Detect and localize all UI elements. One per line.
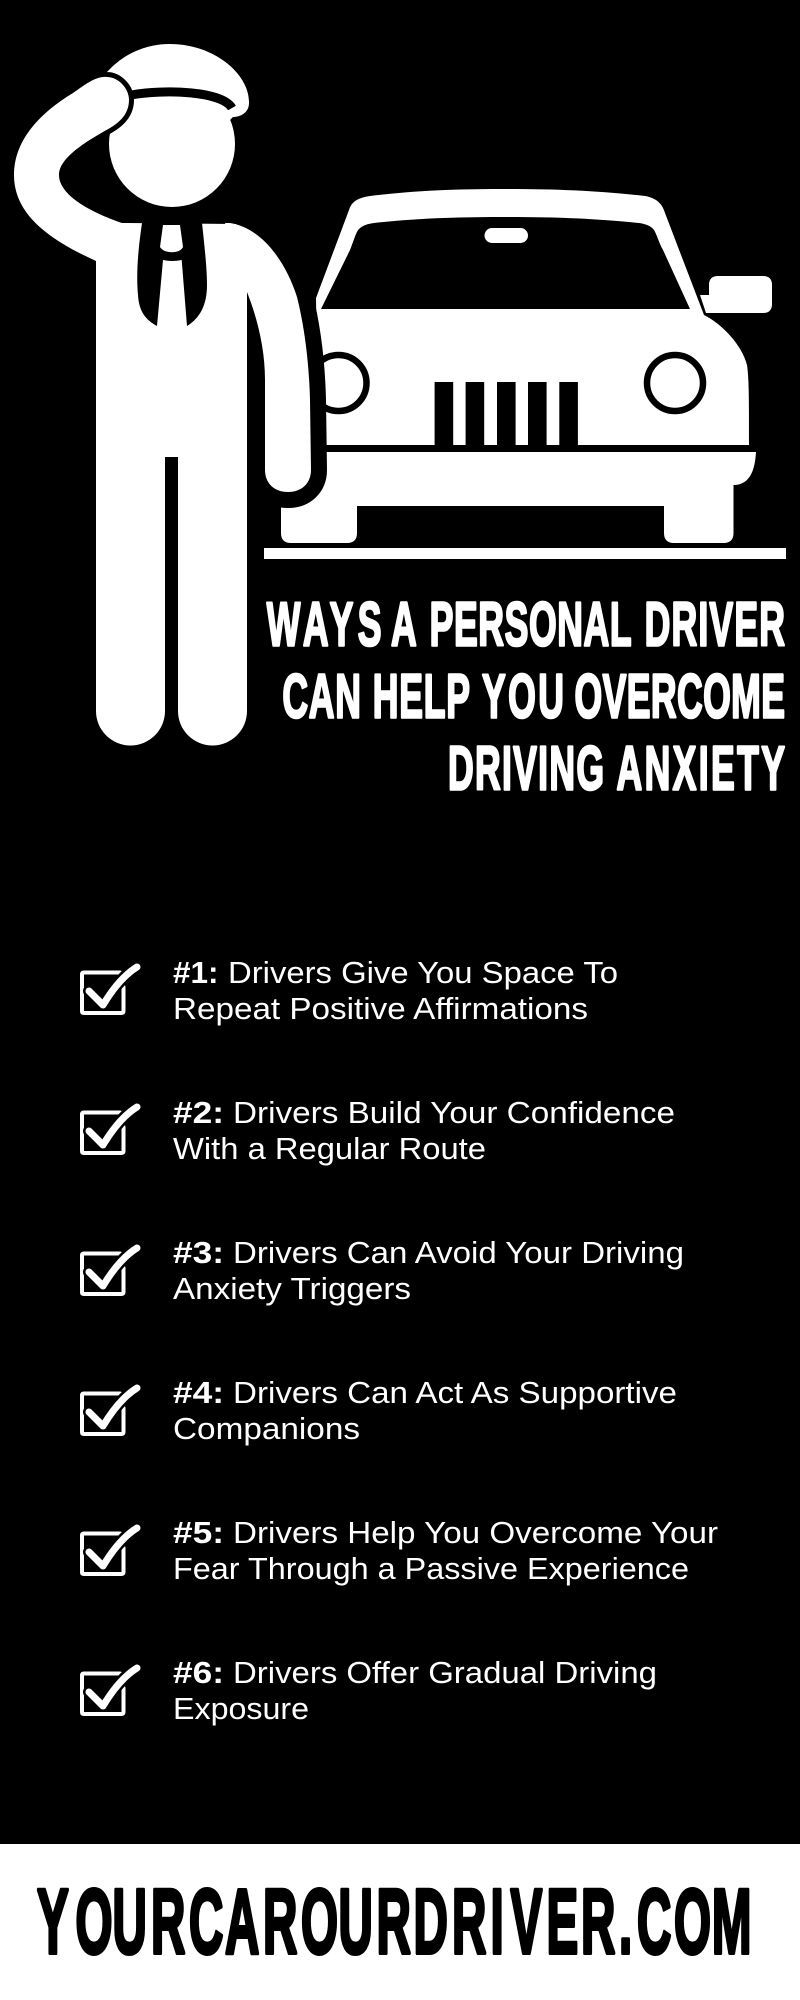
title: YOU	[482, 661, 564, 731]
car body and roof	[316, 189, 749, 445]
footer band	[0, 1844, 800, 2000]
title: OVERCOME	[575, 661, 785, 731]
title: HELP	[373, 661, 470, 731]
list item 6: Exposure	[173, 1691, 309, 1726]
title: CAN	[282, 661, 361, 731]
list item 5: Fear Through a Passive Experience	[173, 1551, 689, 1586]
list item 1: Repeat Positive Affirmations	[173, 991, 588, 1026]
list item 2: Drivers Build Your Confidence	[233, 1095, 675, 1130]
icon: checkbox	[82, 1668, 137, 1714]
title: DRIVING	[448, 733, 604, 803]
driver lowered arm	[225, 223, 311, 492]
tie knot	[160, 225, 183, 252]
list item 4: Drivers Can Act As Supportive	[233, 1375, 677, 1410]
list item 5: #5:	[173, 1515, 224, 1550]
list item 6: #6:	[173, 1655, 224, 1690]
icon: checkbox	[82, 1528, 137, 1574]
driver collar	[137, 223, 207, 326]
list item 2: With a Regular Route	[173, 1131, 486, 1166]
icon: car front view	[281, 189, 772, 543]
ground line	[264, 548, 786, 559]
tie blade	[157, 260, 187, 326]
title: ANXIETY	[617, 733, 785, 803]
driver torso and legs	[96, 223, 260, 746]
bumper and wheels	[281, 452, 756, 543]
list item 2	[82, 1095, 675, 1166]
title: DRIVER	[645, 589, 785, 659]
icon: checkbox	[82, 967, 137, 1013]
list item 1: Drivers Give You Space To	[228, 955, 618, 990]
list item 3: #3:	[173, 1235, 224, 1270]
list item 3	[82, 1235, 684, 1306]
driver raised arm	[14, 77, 129, 280]
list item 4: #4:	[173, 1375, 224, 1410]
left headlight	[310, 355, 366, 411]
list item 1	[82, 955, 618, 1026]
grille	[435, 382, 578, 445]
title: WAYS	[267, 589, 382, 659]
side mirror	[700, 276, 772, 313]
cap band	[131, 92, 232, 108]
icon: checkbox	[82, 1107, 137, 1153]
list item 6: Drivers Offer Gradual Driving	[233, 1655, 657, 1690]
list item 6	[82, 1655, 657, 1726]
list item 3: Anxiety Triggers	[173, 1271, 411, 1306]
right headlight	[647, 355, 703, 411]
footer website: YOURCAROURDRIVER.COM	[37, 1871, 752, 1973]
icon: checkbox	[82, 1248, 137, 1294]
icon: saluting driver	[14, 44, 311, 746]
icon: checkbox	[82, 1388, 137, 1434]
list item 4	[82, 1375, 677, 1446]
driver cap	[107, 44, 249, 125]
list item 5	[82, 1515, 718, 1586]
title: PERSONAL	[430, 589, 632, 659]
list item 4: Companions	[173, 1411, 360, 1446]
rear-view mirror	[484, 228, 528, 243]
title	[267, 589, 785, 803]
list item 3: Drivers Can Avoid Your Driving	[233, 1235, 684, 1270]
list item 5: Drivers Help You Overcome Your	[233, 1515, 718, 1550]
list item 2: #2:	[173, 1095, 224, 1130]
title: A	[391, 589, 417, 659]
driver head	[109, 81, 235, 207]
car windshield	[321, 217, 690, 309]
list item 1: #1:	[173, 955, 218, 990]
